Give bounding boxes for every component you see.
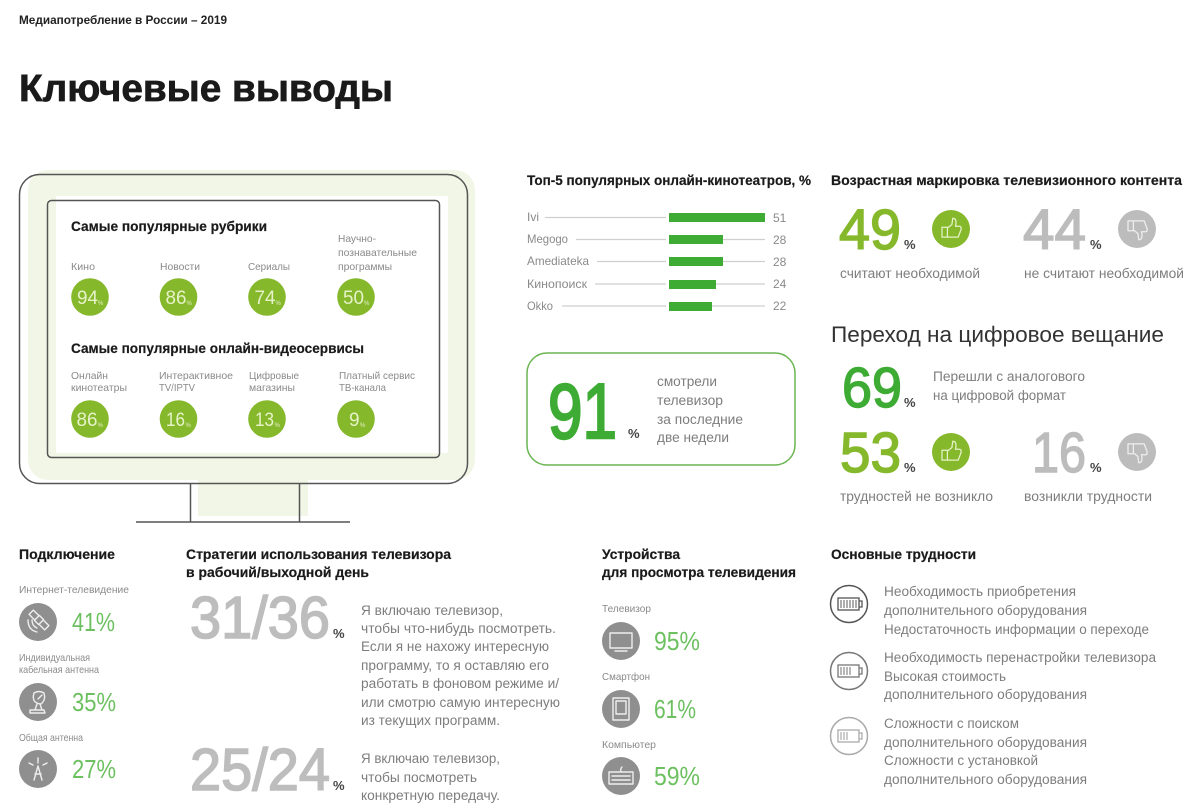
- item: shared antenna: 27%: [72, 754, 116, 784]
- stat circles: categories: [71, 278, 375, 316]
- bar chart: [527, 210, 787, 313]
- text: difficulty group three: [884, 716, 1087, 787]
- text: difficulty group two: [884, 650, 1156, 702]
- panel: top-5 online cinemas: [527, 172, 812, 313]
- text: strategy two: [361, 751, 500, 803]
- labels: categories: Сериалы: [248, 261, 290, 273]
- text: difficulty group three: Сложности с установкой: [884, 753, 1038, 768]
- stat circles: video services: %: [186, 423, 192, 429]
- panel: age rating: [831, 172, 1184, 281]
- labels: categories: программы: [338, 261, 392, 273]
- heading: devices: для просмотра телевидения: [602, 564, 796, 580]
- item: individual cable antenna: кабельная антенна: [19, 664, 99, 676]
- stat circles: categories: %: [186, 301, 192, 307]
- heading: age rating: Возрастная маркировка телевизионного контента: [831, 172, 1182, 188]
- bar chart: Megogo: [527, 232, 568, 246]
- heading: popular video services: Самые популярные онлайн-видеосервисы: [71, 340, 364, 356]
- panel: connection: [19, 546, 129, 788]
- callout: 91% watched TV: за последние: [657, 412, 743, 427]
- labels: video services: [71, 370, 415, 394]
- stat circles: video services: %: [360, 423, 366, 429]
- icon: full battery: [830, 586, 868, 622]
- stat: 49% necessary: считают необходимой: [840, 266, 980, 281]
- text: strategy one: работать в фоновом режиме и/: [361, 676, 559, 691]
- callout: 91% watched TV: смотрели: [657, 374, 717, 389]
- heading: top-5: Топ-5 популярных онлайн-кинотеатров, %: [527, 172, 812, 188]
- stat: 44% not necessary: [1023, 198, 1184, 281]
- heading: strategies: в рабочий/выходной день: [186, 564, 369, 580]
- stat circles: video services: %: [98, 423, 104, 429]
- stat circles: categories: 94: [77, 288, 98, 309]
- labels: categories: познавательные: [338, 247, 417, 259]
- stat: 53% no difficulties: %: [904, 460, 916, 475]
- panel: TV monitor: [20, 170, 475, 522]
- labels: categories: Новости: [160, 261, 200, 273]
- bar chart: 28: [773, 255, 787, 269]
- stat circles: categories: 86: [166, 288, 186, 309]
- stat: 44% not necessary: %: [1090, 237, 1102, 252]
- bar chart: Amediateka: [527, 254, 589, 268]
- labels: video services: TV/IPTV: [159, 382, 195, 394]
- stat: 69% switched: Перешли с аналогового: [933, 369, 1085, 384]
- bar chart: 28: [773, 233, 787, 247]
- text: strategy one: Если я не нахожу интересную: [361, 639, 549, 654]
- text: strategy two: Я включаю телевизор,: [361, 751, 500, 766]
- stat: 69% switched: %: [904, 395, 916, 410]
- stat: 69% switched: 69: [842, 356, 902, 420]
- stat circles: video services: 9: [349, 410, 360, 431]
- labels: video services: Интерактивное: [159, 370, 233, 382]
- item: computer: 59%: [654, 761, 700, 791]
- stat circles: categories: %: [364, 301, 370, 307]
- callout: 91% watched TV: телевизор: [657, 393, 723, 408]
- item: shared antenna: Общая антенна: [19, 732, 83, 744]
- stat: 16% difficulties: 16: [1032, 421, 1086, 485]
- item: individual cable antenna: Индивидуальная: [19, 652, 90, 664]
- item: computer: [602, 739, 700, 795]
- text: difficulty group one: [884, 584, 1149, 637]
- stat: 44% not necessary: не считают необходимой: [1024, 266, 1184, 281]
- item: internet TV: 41%: [72, 607, 115, 637]
- item: television: [602, 603, 700, 660]
- text: difficulty group two: дополнительного оборудования: [884, 687, 1087, 702]
- stat circles: video services: 86: [76, 410, 98, 431]
- stat: 69% switched: на цифровой формат: [933, 388, 1066, 403]
- labels: video services: Платный сервис: [339, 370, 415, 382]
- heading: devices: [602, 546, 796, 580]
- stat: 16% difficulties: [1024, 421, 1156, 504]
- heading: popular categories: Самые популярные рубрики: [71, 218, 267, 234]
- stat circles: categories: 74: [254, 288, 276, 309]
- stat: 49% necessary: [839, 198, 980, 281]
- heading: connection: Подключение: [19, 546, 115, 562]
- stat circles: categories: %: [98, 301, 104, 307]
- stat: 44% not necessary: 44: [1023, 198, 1086, 262]
- text: strategy one: или смотрю самую интересную: [361, 695, 560, 710]
- text: strategy one: чтобы что-нибудь посмотреть.: [361, 621, 556, 636]
- panel: TV usage strategies: [186, 546, 560, 803]
- labels: video services: кинотеатры: [71, 382, 127, 394]
- stat: 49% necessary: 49: [839, 198, 901, 262]
- text: difficulty group one: Недостаточность информации о переходе: [884, 622, 1149, 637]
- labels: categories: Кино: [71, 261, 95, 273]
- labels: categories: [71, 233, 417, 273]
- text: difficulty group one: дополнительного оборудования: [884, 603, 1087, 618]
- text: difficulty group three: дополнительного оборудования: [884, 772, 1087, 787]
- text: strategy two: конкретную передачу.: [361, 788, 500, 803]
- stat: 53% no difficulties: трудностей не возникло: [840, 489, 993, 504]
- item: internet TV: Интернет-телевидение: [19, 584, 129, 596]
- stat circles: video services: [71, 400, 375, 438]
- heading: devices: Устройства: [602, 546, 680, 562]
- stat circles: video services: 13: [255, 410, 274, 431]
- stat circles: categories: %: [276, 301, 282, 307]
- item: internet TV: [19, 584, 129, 641]
- text: difficulty group one: Необходимость приобретения: [884, 584, 1076, 599]
- labels: categories: Научно-: [338, 233, 376, 245]
- item: shared antenna: [19, 732, 116, 788]
- bar chart: Ivi: [527, 210, 539, 224]
- item: individual cable antenna: [19, 652, 116, 721]
- stat: 31/36%: 31/36: [190, 585, 330, 651]
- labels: video services: Онлайн: [71, 370, 108, 382]
- text: strategy one: из текущих программ.: [361, 713, 500, 728]
- title: Ключевые выводы: [19, 68, 393, 110]
- bar chart: Okko: [527, 299, 553, 313]
- text: strategy one: Я включаю телевизор,: [361, 603, 503, 618]
- labels: video services: магазины: [249, 382, 295, 394]
- text: difficulty group three: Сложности с поиском: [884, 716, 1019, 731]
- stat circles: video services: 16: [166, 410, 185, 431]
- stat: 25/24%: 25/24: [190, 737, 330, 803]
- callout: 91% watched TV: %: [628, 426, 640, 441]
- callout: 91% watched TV: [527, 353, 795, 465]
- bar chart: 24: [773, 277, 787, 291]
- stat: 53% no difficulties: 53: [840, 421, 901, 485]
- stat: 16% difficulties: %: [1090, 460, 1102, 475]
- item: individual cable antenna: 35%: [72, 687, 116, 717]
- stat: 31/36%: %: [333, 626, 345, 641]
- item: television: 95%: [654, 626, 700, 656]
- text: strategy two: чтобы посмотреть: [361, 770, 477, 785]
- labels: video services: ТВ-канала: [339, 382, 386, 394]
- stat circles: video services: %: [274, 423, 280, 429]
- bar chart: 51: [773, 211, 787, 225]
- heading: digital transition: Переход на цифровое вещание: [831, 322, 1164, 347]
- stat: 25/24%: %: [333, 778, 345, 793]
- callout: 91% watched TV: две недели: [657, 430, 729, 445]
- labels: video services: Цифровые: [249, 370, 299, 382]
- stat: 16% difficulties: возникли трудности: [1024, 489, 1152, 504]
- text: difficulty group two: Высокая стоимость: [884, 669, 1006, 684]
- panel: digital transition: [831, 322, 1164, 504]
- bar chart: Кинопоиск: [527, 277, 588, 291]
- stat: 53% no difficulties: [840, 421, 993, 504]
- item: smartphone: [602, 671, 696, 728]
- stat circles: categories: 50: [343, 288, 364, 309]
- callout: 91% watched TV: 91: [548, 367, 617, 455]
- item: television: Телевизор: [602, 603, 651, 615]
- item: smartphone: Смартфон: [602, 671, 650, 683]
- panel: viewing devices: [602, 546, 796, 795]
- text: strategy one: [361, 603, 560, 728]
- heading: strategies: Стратегии использования телевизора: [186, 546, 451, 562]
- heading: strategies: [186, 546, 451, 580]
- report header: Медиапотребление в России – 2019: [19, 15, 227, 27]
- stat: 69% switched: [842, 356, 1085, 420]
- icon: low battery: [830, 718, 868, 754]
- text: difficulty group three: дополнительного оборудования: [884, 735, 1087, 750]
- stat: 49% necessary: %: [904, 237, 916, 252]
- text: strategy one: программу, то я оставляю его: [361, 658, 549, 673]
- item: computer: Компьютер: [602, 739, 656, 751]
- bar chart: 22: [773, 299, 787, 313]
- heading: difficulties: Основные трудности: [831, 546, 976, 562]
- panel: main difficulties: [830, 546, 1156, 787]
- text: difficulty group two: Необходимость перенастройки телевизора: [884, 650, 1156, 665]
- item: smartphone: 61%: [654, 694, 696, 724]
- icon: medium battery: [830, 652, 868, 690]
